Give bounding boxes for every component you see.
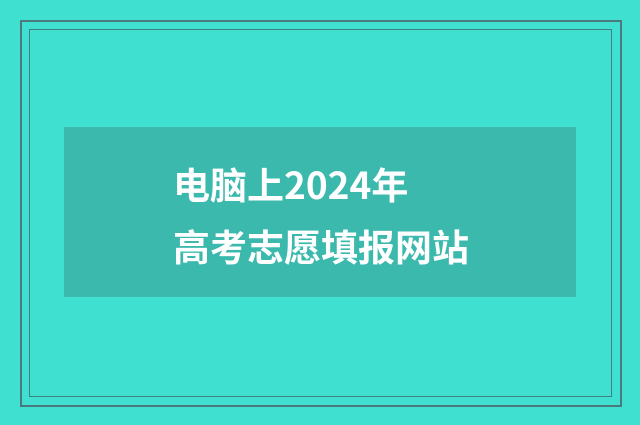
inner frame xyxy=(29,29,612,397)
title line 1: 电脑上2024年 xyxy=(173,156,408,210)
panel: title banner xyxy=(64,127,576,297)
title line 2: 高考志愿填报网站 xyxy=(173,218,469,272)
